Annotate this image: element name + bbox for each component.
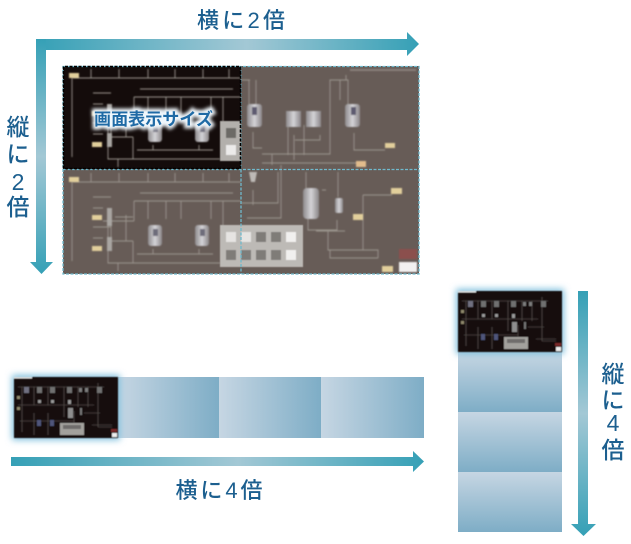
arrow: horizontal 4x: [11, 451, 424, 472]
heading: 縦に2倍: 縦: [6, 114, 30, 140]
heading: 横に4倍: 横に4倍: [176, 478, 262, 503]
heading: 縦に4倍: 4: [607, 410, 620, 436]
diagram: bottom right process: [241, 165, 417, 272]
text glow: 画面表示サイズ: [94, 109, 213, 129]
arrow: vertical 2x: [30, 39, 53, 274]
arrow: horizontal 2x: [36, 32, 419, 56]
heading: 縦に2倍: 倍: [6, 194, 30, 220]
label: 画面表示サイズ: 画面表示サイズ: [94, 109, 213, 129]
tile outline: display size: [64, 66, 240, 168]
panel: process screen enlarged 2x: [63, 66, 419, 274]
heading: 縦に2倍: 2: [12, 169, 24, 195]
thumbnail screen: [458, 291, 562, 352]
diagram: top left process: [69, 69, 241, 167]
heading: 縦に2倍: に: [6, 141, 30, 167]
heading: 縦に4倍: 縦: [602, 361, 624, 387]
panel: horizontal 4x strip: [12, 375, 424, 440]
heading: 縦に4倍: [602, 361, 624, 463]
glow: [12, 375, 120, 440]
heading: 縦に4倍: 倍: [602, 437, 624, 463]
thumbnail screen: [14, 377, 118, 438]
grid: dashed tile dividers: [63, 66, 419, 274]
heading: 横に2倍: 横に2倍: [197, 8, 285, 33]
heading: 縦に2倍: [6, 114, 30, 220]
mini control panel on black tile: [220, 121, 241, 161]
control button panel: [220, 225, 303, 267]
arrow: vertical 4x: [571, 291, 596, 536]
glow: [456, 289, 564, 354]
diagram: bottom left process: [69, 173, 241, 271]
screen tile: original display size: [63, 66, 241, 169]
panel: vertical 4x strip: [456, 289, 564, 532]
heading: 縦に4倍: に: [602, 387, 624, 413]
diagram: top right process: [241, 69, 416, 167]
